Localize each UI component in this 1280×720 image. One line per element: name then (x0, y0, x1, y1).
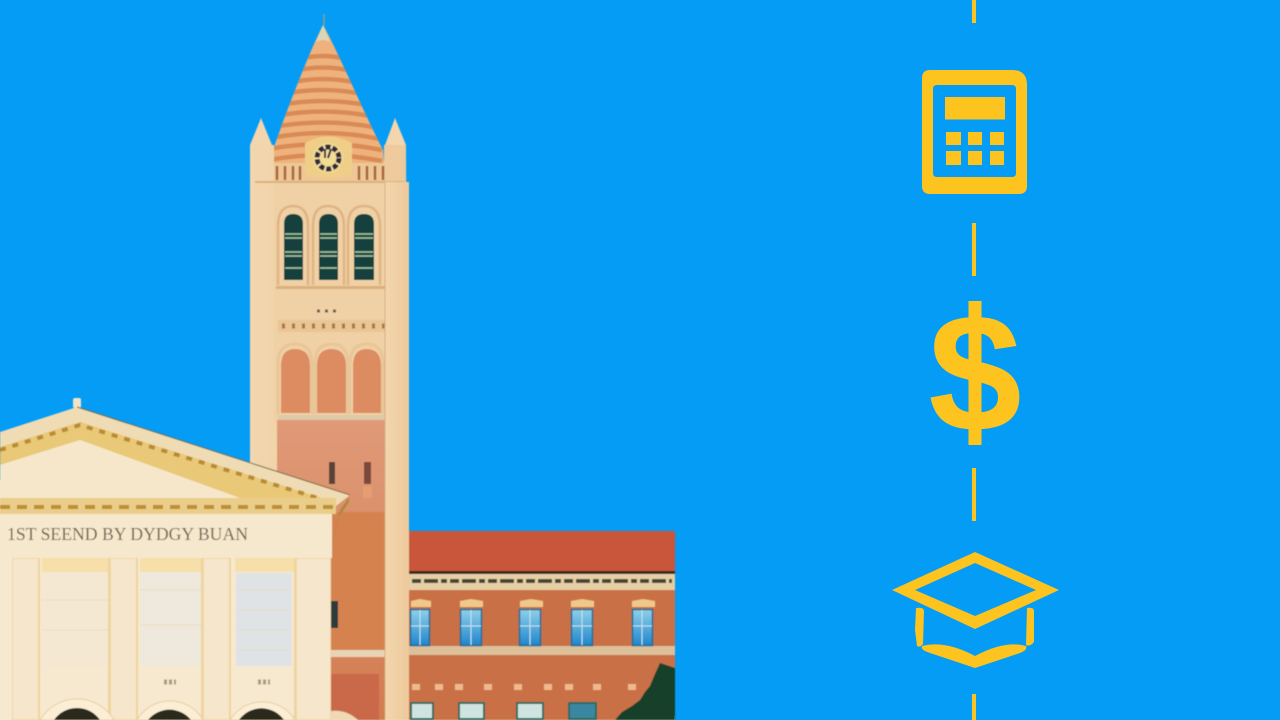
temple arches (40, 699, 295, 720)
tower upper windows (276, 206, 386, 289)
right brick wing (409, 531, 675, 720)
icon: dollar sign: $ (928, 279, 1022, 467)
tower shaft stone (250, 145, 409, 720)
icon: calculator (922, 70, 1027, 194)
temple side dome (331, 711, 358, 720)
tree (615, 663, 675, 720)
tower frieze (278, 311, 394, 332)
tower (250, 14, 409, 720)
inscription: 1ST SEEND BY DYDGY BUAN (7, 524, 248, 544)
campus building photo cutout (0, 14, 675, 720)
tower balustrade (255, 163, 405, 183)
tower brick lower section (277, 420, 385, 720)
tower brick arches (278, 344, 386, 420)
tower spire (264, 14, 384, 163)
temple entablature (0, 497, 349, 558)
temple facade (0, 398, 358, 720)
building edge underlay (0, 480, 675, 720)
tower pinnacles (250, 118, 406, 145)
clock (305, 136, 352, 178)
temple pediment (0, 398, 350, 506)
temple wall and columns (0, 558, 330, 720)
dashed connector (972, 0, 976, 720)
icon: graduation cap (892, 552, 1059, 668)
